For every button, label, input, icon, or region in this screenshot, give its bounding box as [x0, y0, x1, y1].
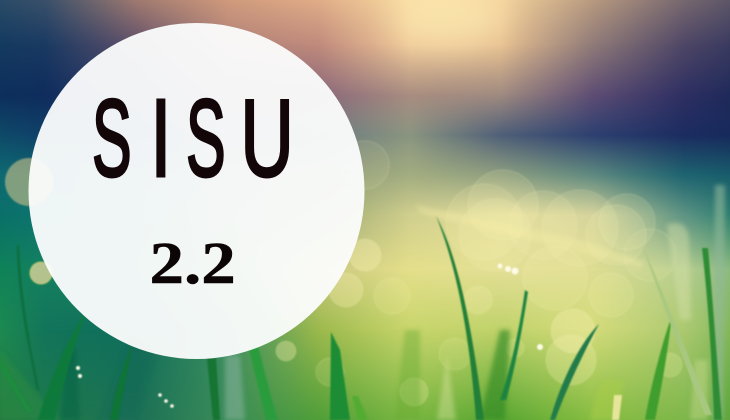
title: SISU [94, 98, 290, 178]
left bokeh discs [5, 158, 53, 284]
title: SISU: U [240, 76, 294, 199]
dew drops [76, 264, 543, 408]
title: SISU: S [186, 76, 226, 200]
light streak [415, 205, 645, 268]
grass blades [0, 216, 722, 420]
panel: translucent white circle [28, 23, 364, 359]
sun glow [395, 0, 505, 48]
blurred foreground stems [0, 185, 725, 420]
title: SISU: S [92, 76, 132, 200]
title: SISU: I [150, 77, 171, 199]
bokeh circles [276, 141, 682, 406]
version number: 2.2: 2.2 [150, 231, 236, 296]
